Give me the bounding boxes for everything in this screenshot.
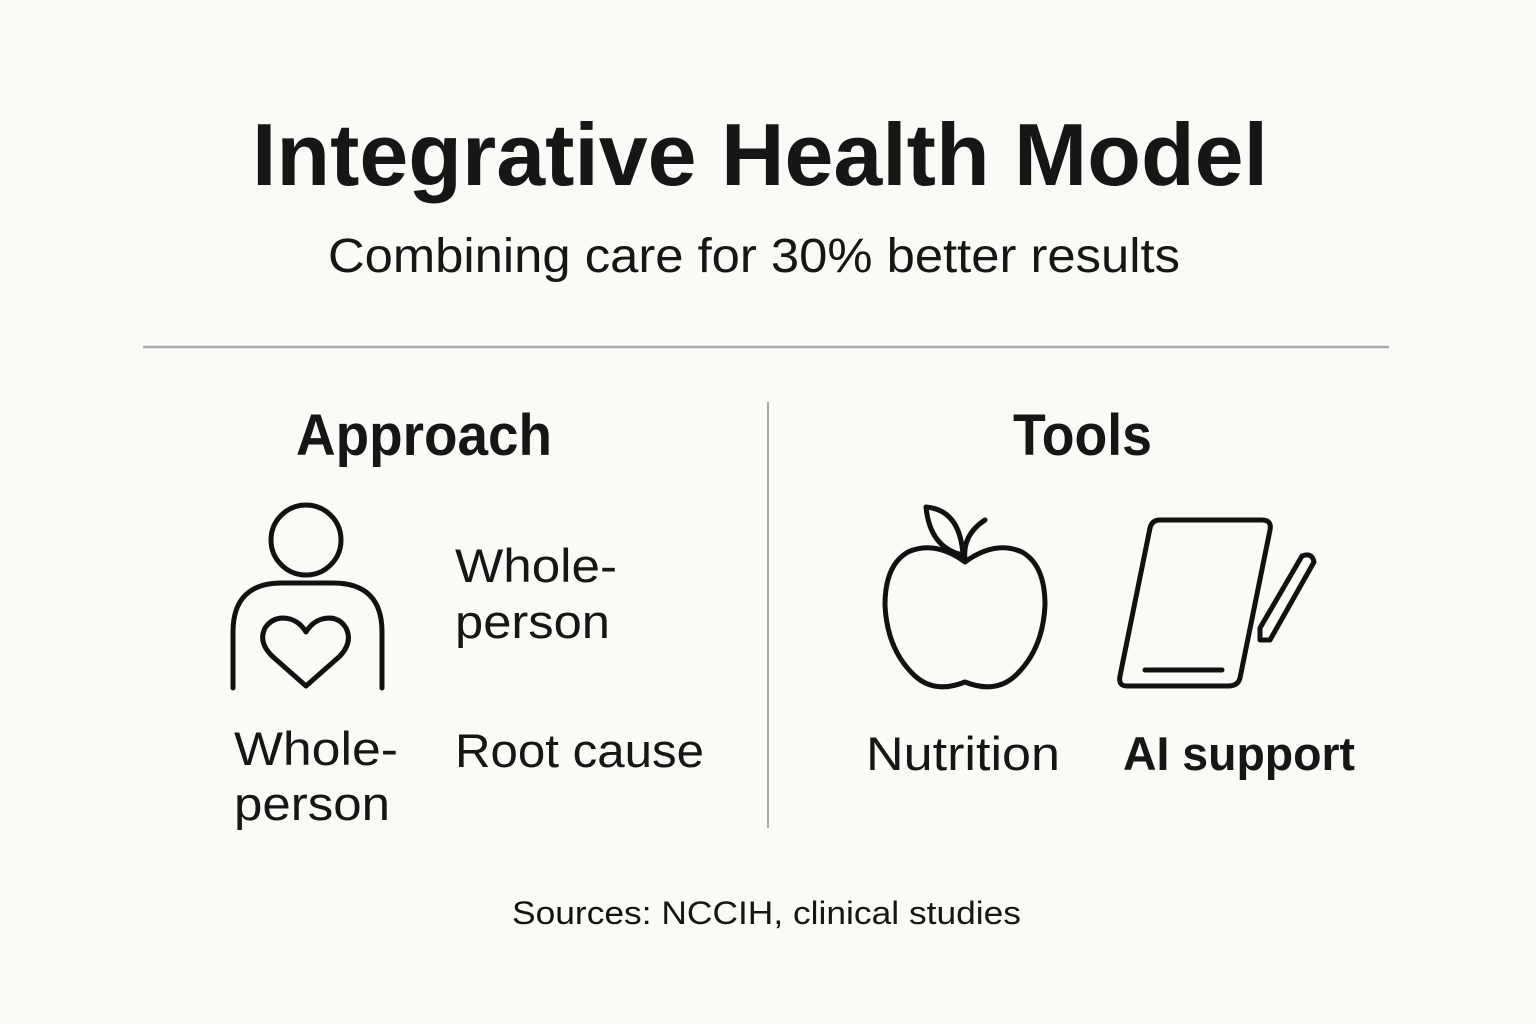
label: whole-person (right): person	[455, 595, 610, 648]
icon: apple	[885, 507, 1045, 687]
icon: person with heart	[233, 505, 382, 688]
label: ai support: AI support	[1123, 727, 1355, 780]
subtitle: Combining care for 30% better results	[328, 230, 1180, 283]
heading: tools: Tools	[1013, 403, 1152, 468]
panel: tools	[866, 403, 1355, 780]
heading: approach: Approach	[296, 403, 552, 468]
icon: tablet with pen	[1120, 520, 1314, 686]
label: whole-person (below icon): person	[234, 777, 390, 830]
panel: approach	[233, 403, 704, 830]
label: whole-person (below icon): Whole-	[234, 722, 398, 775]
sources footnote: Sources: NCCIH, clinical studies	[512, 895, 1021, 931]
label: root cause: Root cause	[455, 724, 704, 777]
label: whole-person (right): Whole-	[455, 539, 617, 592]
label: nutrition: Nutrition	[866, 727, 1060, 780]
title: Integrative Health Model	[252, 105, 1268, 204]
